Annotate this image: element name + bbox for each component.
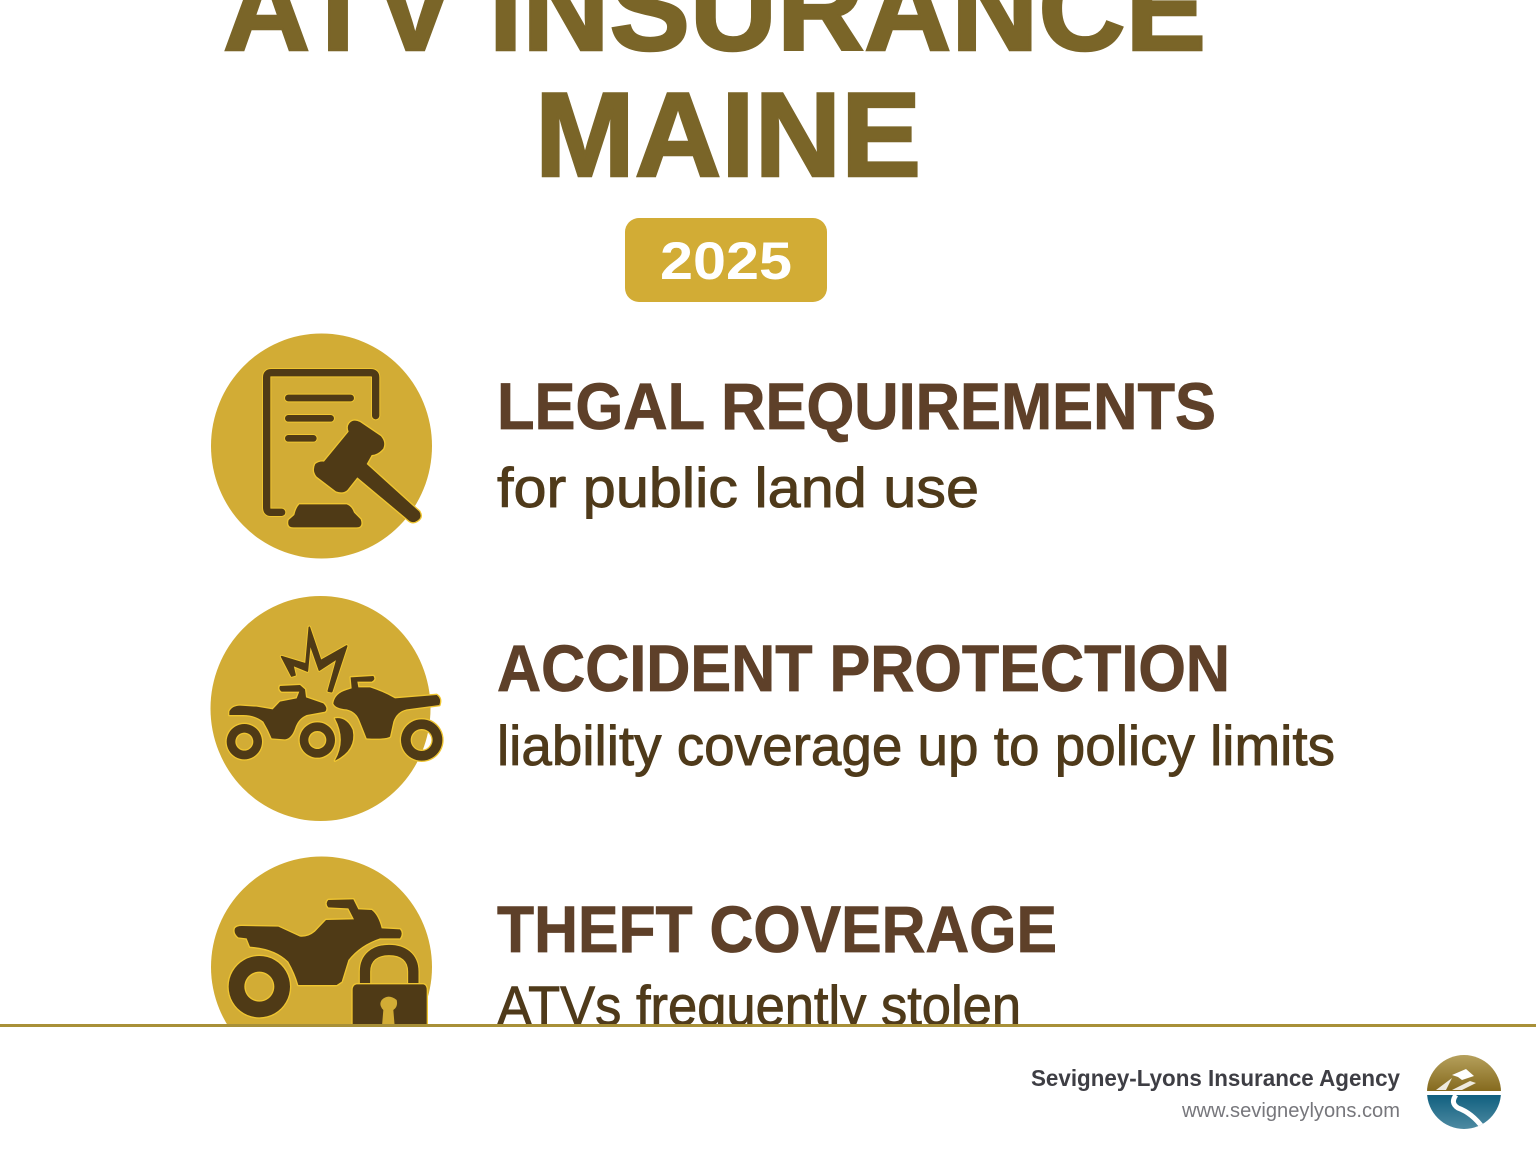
footer [0, 1024, 1536, 1129]
agency name: Sevigney-Lyons Insurance Agency [1031, 1065, 1400, 1091]
title: MAINE [535, 68, 921, 202]
year badge [625, 218, 827, 302]
text: liability coverage: liability coverage up to policy limits [497, 714, 1335, 777]
heading: legal requirements: LEGAL REQUIREMENTS [497, 369, 1216, 443]
text: for public land use: for public land use [497, 456, 979, 519]
icon: colliding ATVs [210, 596, 442, 821]
heading: accident protection: ACCIDENT PROTECTION [497, 631, 1230, 705]
panel: theft coverage [211, 856, 1057, 1078]
panel: legal requirements [211, 334, 1216, 558]
icon: agency logo [1426, 1055, 1502, 1130]
year badge: 2025 [660, 232, 792, 291]
heading: theft coverage: THEFT COVERAGE [497, 892, 1057, 966]
text: ATVs frequently stolen: ATVs frequently stolen [497, 974, 1021, 1037]
icon: ATV with padlock [211, 856, 432, 1078]
icon: document and gavel [211, 334, 432, 558]
agency website: www.sevigneylyons.com [1181, 1100, 1400, 1122]
panel: accident protection [210, 596, 1335, 821]
title [223, 0, 1206, 202]
